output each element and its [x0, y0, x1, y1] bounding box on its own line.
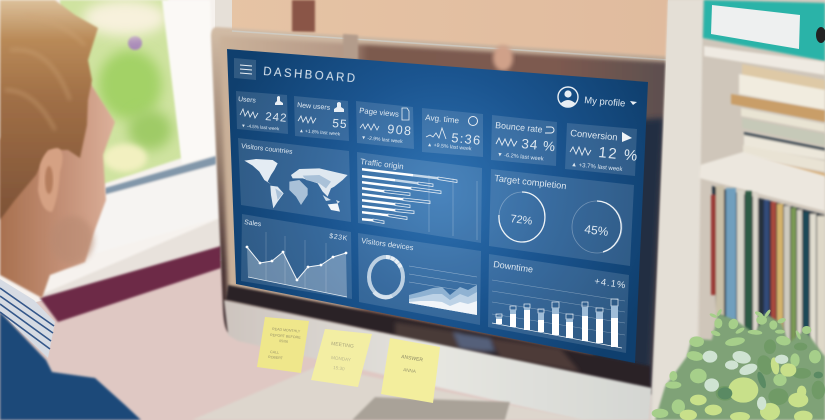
- panel: visitors devices: Visitors devices: [361, 236, 414, 252]
- note 1: REPORT BEFORE: [270, 333, 301, 340]
- note 2: 15:30: [333, 365, 345, 371]
- panel: traffic origin: Traffic origin: [360, 157, 404, 171]
- card: users: [236, 91, 288, 134]
- purple wall trim: [40, 246, 221, 322]
- right dark glass: [590, 118, 664, 385]
- panel: sales: $23K: [329, 233, 348, 243]
- note 3: ANNA: [403, 367, 417, 374]
- dashboard screen: [227, 49, 648, 363]
- card: average time: [422, 108, 483, 157]
- card: new users: New users: [297, 102, 331, 112]
- card: page views: ▼ -2.9% last week: [361, 135, 403, 145]
- sticky notes: [257, 317, 440, 403]
- note 3: ANSWER: [401, 354, 424, 363]
- card: bounce rate: ▼ -6.2% last week: [497, 152, 544, 162]
- jacket: [0, 312, 141, 420]
- card: page views: Page views: [359, 106, 399, 119]
- gauge 45%: [572, 201, 622, 253]
- neck and face: [0, 60, 115, 298]
- note 2: [311, 329, 372, 387]
- monitor bezel: [211, 27, 672, 395]
- card: page views: [356, 101, 414, 149]
- card: average time: 5:36: [451, 130, 482, 148]
- desk and stand: [192, 366, 585, 420]
- shelf unit: [652, 0, 825, 420]
- reflected window strip: [343, 34, 358, 60]
- upper shelf board: [704, 46, 825, 75]
- card: conversion: [565, 123, 640, 176]
- profile: My profile: [584, 95, 626, 110]
- card: average time: Avg. time: [425, 113, 460, 125]
- hair highlights: [5, 15, 85, 130]
- card: new users: 55: [332, 116, 348, 131]
- gauge 45%: 45%: [584, 222, 610, 239]
- panel: traffic origin: [357, 152, 482, 243]
- card: bounce rate: Bounce rate: [495, 120, 543, 135]
- donut chart: [369, 257, 403, 297]
- hair: [0, 0, 98, 220]
- card: users: Users: [238, 96, 257, 105]
- panel: visitors devices: [358, 233, 481, 325]
- reflected face: [493, 45, 513, 71]
- note 1: READ MONTHLY: [272, 327, 301, 334]
- card: bounce rate: 34 %: [521, 136, 557, 154]
- bar chart: [492, 280, 625, 348]
- stacked books: [731, 64, 825, 178]
- card: average time: ▲ +9.5% last week: [427, 142, 472, 152]
- card: bounce rate: [491, 115, 557, 166]
- striped collar: [0, 279, 55, 358]
- card: new users: ▲ +1.8% last week: [299, 128, 341, 138]
- ear: [38, 148, 63, 212]
- monitor: [211, 27, 672, 420]
- lower shelf board: [699, 152, 825, 211]
- card: conversion: 12 %: [598, 144, 640, 165]
- profile: [558, 87, 637, 110]
- window garden view: [60, 0, 216, 185]
- note 2: MONDAY: [331, 355, 351, 362]
- panel: visitors countries: [238, 138, 351, 222]
- note 1: ROBERT: [268, 355, 284, 360]
- plant: [652, 308, 825, 420]
- note 1: CALL: [270, 350, 279, 355]
- note 1: 05/06: [279, 339, 288, 344]
- panel: sales: [241, 214, 352, 299]
- panel: downtime: +4.1%: [594, 276, 627, 291]
- screen reflections: [220, 36, 668, 385]
- aluminium chin: [224, 300, 652, 420]
- gauge 72%: 72%: [510, 213, 533, 228]
- vertical books: [711, 186, 825, 361]
- panel: sales: Sales: [244, 219, 262, 228]
- panel: target completion: [489, 169, 634, 266]
- menu button: [234, 58, 256, 80]
- top silver edge: [232, 31, 668, 60]
- note 2: MEETING: [331, 341, 354, 350]
- window sill: [40, 156, 220, 300]
- panel: target completion: Target completion: [494, 173, 567, 191]
- panel: downtime: Downtime: [493, 259, 534, 275]
- panel: visitors countries: Visitors countries: [241, 143, 293, 156]
- lower dark glass: [226, 285, 650, 388]
- screen background: [227, 49, 648, 363]
- card: users: ▼ -4.5% last week: [241, 123, 280, 131]
- panel: downtime: [488, 254, 629, 353]
- reflected hands and shirt: [395, 322, 580, 372]
- right metal edge: [650, 57, 672, 420]
- card: users: 242: [265, 111, 288, 125]
- card: new users: [294, 96, 349, 141]
- horizontal bar chart: [362, 168, 477, 240]
- note 3: [381, 338, 440, 403]
- world map: [244, 159, 348, 212]
- note 1: [257, 317, 309, 373]
- gauge 72%: [499, 192, 545, 242]
- card: page views: 908: [387, 122, 413, 138]
- card: conversion: Conversion: [570, 127, 618, 143]
- stacked area chart: [409, 266, 477, 315]
- binder: [703, 0, 825, 61]
- upright: [652, 0, 705, 420]
- area line chart: [246, 232, 347, 297]
- person: [0, 0, 141, 420]
- stubble shading: [50, 216, 94, 264]
- title: DASHBOARD: [263, 66, 358, 85]
- card: conversion: ▲ +3.7% last week: [571, 162, 624, 173]
